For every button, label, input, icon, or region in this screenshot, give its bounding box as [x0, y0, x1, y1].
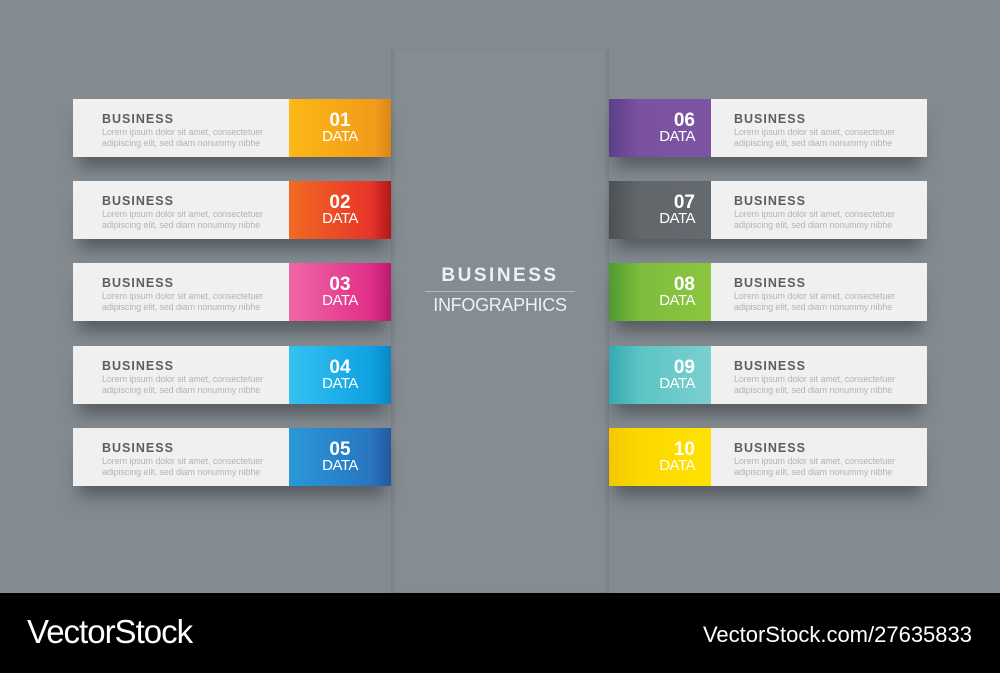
card 10: DATA	[659, 457, 695, 474]
card 08	[609, 263, 927, 321]
card 08: 08	[674, 274, 695, 295]
card 04	[73, 346, 391, 404]
card 03: Lorem ipsum dolor sit amet, consectetuer	[102, 291, 263, 301]
card 09: Lorem ipsum dolor sit amet, consectetuer	[734, 374, 895, 384]
footer url: VectorStock.com/27635833	[703, 622, 972, 647]
card 10: Lorem ipsum dolor sit amet, consectetuer	[734, 456, 895, 466]
card 10: 10	[674, 439, 695, 460]
card 07: DATA	[659, 210, 695, 227]
card 01: Lorem ipsum dolor sit amet, consectetuer	[102, 127, 263, 137]
card 05	[73, 428, 391, 486]
card 07: 07	[674, 192, 695, 213]
card 08: DATA	[659, 292, 695, 309]
card 02: 02	[329, 192, 351, 213]
card 09: DATA	[659, 375, 695, 392]
card 04: DATA	[322, 375, 358, 392]
card 06: BUSINESS	[734, 112, 806, 126]
card 08: BUSINESS	[734, 276, 806, 290]
card 05: BUSINESS	[102, 441, 174, 455]
card 07: adipiscing elit, sed diam nonummy nibhe	[734, 220, 892, 230]
card 05: adipiscing elit, sed diam nonummy nibhe	[102, 467, 260, 477]
card 09: adipiscing elit, sed diam nonummy nibhe	[734, 385, 892, 395]
card 03: adipiscing elit, sed diam nonummy nibhe	[102, 302, 260, 312]
card 04: adipiscing elit, sed diam nonummy nibhe	[102, 385, 260, 395]
card 02: Lorem ipsum dolor sit amet, consectetuer	[102, 209, 263, 219]
card 07	[609, 181, 927, 239]
card 01: adipiscing elit, sed diam nonummy nibhe	[102, 138, 260, 148]
card 06: DATA	[659, 128, 695, 145]
card 06: 06	[674, 110, 695, 131]
card 03: 03	[329, 274, 351, 295]
card 04: 04	[329, 357, 351, 378]
card 05: 05	[329, 439, 351, 460]
title: BUSINESS	[441, 265, 559, 286]
card 10	[609, 428, 927, 486]
card 02: DATA	[322, 210, 358, 227]
card 05: Lorem ipsum dolor sit amet, consectetuer	[102, 456, 263, 466]
card 02: BUSINESS	[102, 194, 174, 208]
card 02	[73, 181, 391, 239]
card 04: BUSINESS	[102, 359, 174, 373]
footer bar	[0, 593, 1000, 673]
title: INFOGRAPHICS	[433, 295, 567, 315]
title	[425, 265, 575, 315]
card 10: BUSINESS	[734, 441, 806, 455]
card 06	[609, 99, 927, 157]
card 06: adipiscing elit, sed diam nonummy nibhe	[734, 138, 892, 148]
card 01: 01	[329, 110, 351, 131]
card 05: DATA	[322, 457, 358, 474]
card 01: DATA	[322, 128, 358, 145]
card 04: Lorem ipsum dolor sit amet, consectetuer	[102, 374, 263, 384]
card 02: adipiscing elit, sed diam nonummy nibhe	[102, 220, 260, 230]
card 09: 09	[674, 357, 695, 378]
card 06: Lorem ipsum dolor sit amet, consectetuer	[734, 127, 895, 137]
card 08: Lorem ipsum dolor sit amet, consectetuer	[734, 291, 895, 301]
card 01: BUSINESS	[102, 112, 174, 126]
card 01	[73, 99, 391, 157]
card 03: DATA	[322, 292, 358, 309]
card 07: Lorem ipsum dolor sit amet, consectetuer	[734, 209, 895, 219]
card 09	[609, 346, 927, 404]
card 07: BUSINESS	[734, 194, 806, 208]
center panel	[391, 50, 609, 593]
card 09: BUSINESS	[734, 359, 806, 373]
card 03	[73, 263, 391, 321]
card 08: adipiscing elit, sed diam nonummy nibhe	[734, 302, 892, 312]
card 03: BUSINESS	[102, 276, 174, 290]
footer logo: VectorStock	[27, 613, 192, 650]
card 10: adipiscing elit, sed diam nonummy nibhe	[734, 467, 892, 477]
